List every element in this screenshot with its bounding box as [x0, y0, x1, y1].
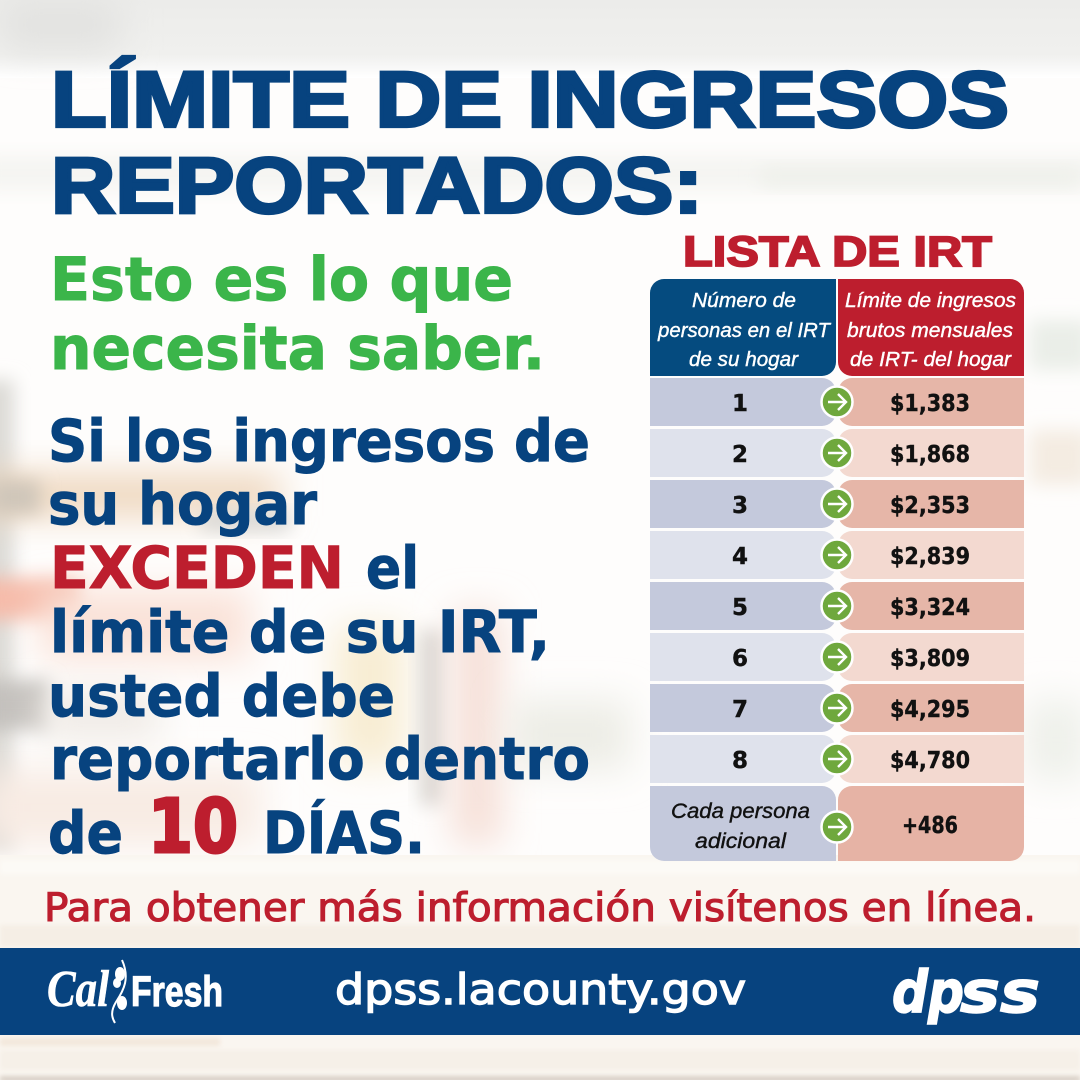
- title: LÍMITE DE INGRESOS: [51, 54, 1009, 144]
- row 5: $3,324: [890, 595, 970, 621]
- table header: number of people: de su hogar: [689, 348, 799, 371]
- footer band: [0, 948, 1080, 1035]
- row 7: $4,295: [890, 697, 970, 723]
- table header: monthly gross income limit: de IRT- del hogar: [850, 348, 1012, 371]
- row 8: $4,780: [890, 748, 970, 774]
- logo: DPSS: ss: [960, 958, 1040, 1026]
- row 7: [650, 684, 1024, 732]
- row 2: $1,868: [890, 442, 970, 468]
- table header: number of people: Número de: [692, 289, 796, 312]
- row: each additional person: +486: [902, 813, 958, 839]
- table header: number of people: [650, 279, 836, 376]
- logo: CalFresh: [47, 960, 223, 1023]
- body text: reporting rule: EXCEDEN: [50, 534, 344, 602]
- row: each additional person: adicional: [695, 830, 787, 853]
- body text: reporting rule: Si los ingresos de: [48, 407, 590, 475]
- row 5: [650, 582, 1024, 630]
- body text: reporting rule: límite de su IRT,: [50, 598, 550, 666]
- row 5: 5: [732, 595, 748, 621]
- row 8: [650, 735, 1024, 783]
- table header: number of people: personas en el IRT: [657, 319, 831, 342]
- title: [51, 54, 1009, 230]
- row 4: [650, 531, 1024, 579]
- body text: reporting rule: DÍAS.: [263, 798, 425, 867]
- row 8: 8: [732, 748, 748, 774]
- logo: DPSS: [892, 958, 1040, 1026]
- row 3: 3: [732, 493, 748, 519]
- row 2: [650, 429, 1024, 477]
- call to action text: Para obtener más información visítenos en línea.: [44, 886, 1036, 931]
- subheading: esto es lo que necesita saber: Esto es lo que: [50, 245, 513, 315]
- body text: reporting rule: su hogar: [48, 470, 317, 538]
- table header: monthly gross income limit: [838, 279, 1024, 376]
- wood table band: [0, 855, 1080, 1080]
- row 3: $2,353: [890, 493, 970, 519]
- website url: dpss.lacounty.gov: [335, 965, 746, 1014]
- row 6: 6: [732, 646, 748, 672]
- body text: reporting rule: reportarlo dentro: [50, 725, 590, 793]
- table header: monthly gross income limit: brutos mensuales: [847, 319, 1013, 342]
- title: REPORTADOS:: [51, 140, 703, 230]
- row 7: 7: [732, 697, 748, 723]
- logo: CalFresh: Fresh: [131, 968, 223, 1016]
- row: each additional person: [650, 786, 1024, 861]
- row 1: $1,383: [890, 391, 970, 417]
- row 3: [650, 480, 1024, 528]
- logo: DPSS: dp: [892, 958, 964, 1026]
- table header: monthly gross income limit: Límite de ingresos: [845, 289, 1016, 312]
- row: each additional person: Cada persona: [671, 800, 810, 823]
- subheading: esto es lo que necesita saber: necesita saber.: [50, 314, 545, 384]
- body text: reporting rule: [48, 407, 590, 870]
- row 2: 2: [732, 442, 748, 468]
- body text: reporting rule: el: [366, 534, 419, 602]
- body text: reporting rule: 10: [148, 784, 238, 870]
- row 6: $3,809: [890, 646, 970, 672]
- row 6: [650, 633, 1024, 681]
- logo: CalFresh: Cal: [47, 961, 109, 1018]
- subheading: esto es lo que necesita saber: [50, 245, 545, 384]
- body text: reporting rule: usted debe: [48, 662, 395, 730]
- row 1: [650, 378, 1024, 426]
- row 4: 4: [732, 544, 748, 570]
- body text: reporting rule: de: [48, 799, 123, 867]
- table heading: LISTA DE IRT: [683, 228, 992, 276]
- row 1: 1: [732, 391, 748, 417]
- row 4: $2,839: [890, 544, 970, 570]
- panel: IRT income limit table: [650, 279, 1024, 861]
